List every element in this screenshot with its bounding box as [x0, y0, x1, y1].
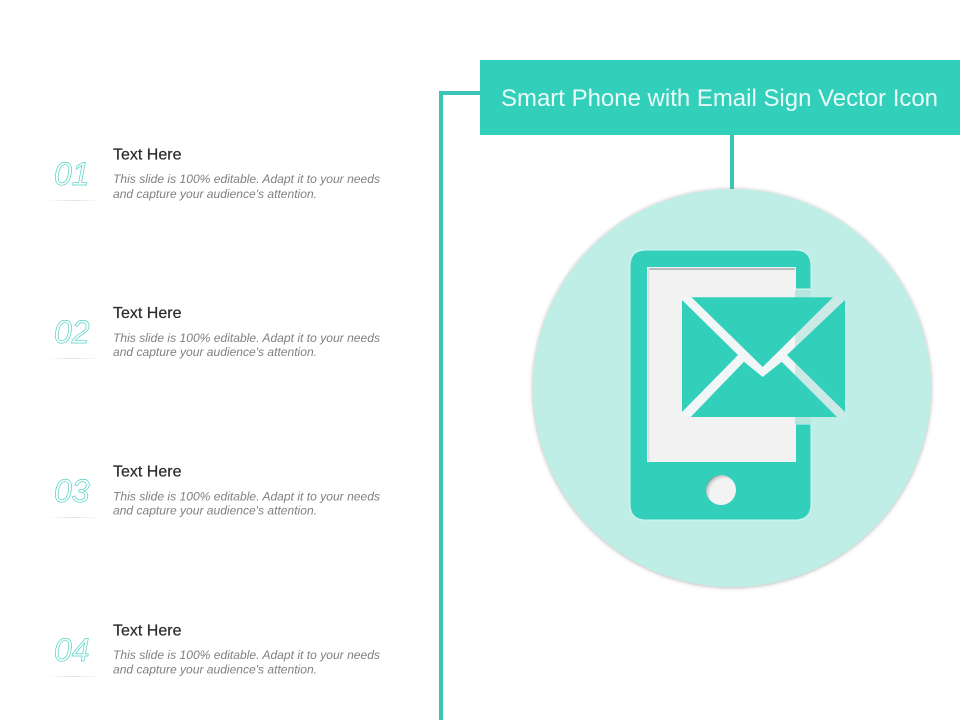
title banner	[480, 60, 960, 135]
phone screen	[647, 267, 796, 462]
number 03: 03	[54, 473, 90, 509]
item 02 body	[113, 333, 380, 359]
item 04 body: and capture your audience's attention.	[113, 664, 317, 676]
item 04 body	[113, 650, 380, 676]
item 01 heading: Text Here	[113, 146, 182, 164]
number 04: 04	[54, 632, 90, 668]
item 04 body: This slide is 100% editable. Adapt it to your needs	[113, 650, 380, 662]
item 04	[45, 622, 380, 677]
item 02 heading: Text Here	[113, 305, 182, 322]
item 04 heading: Text Here	[113, 622, 182, 640]
number 01: 01	[54, 156, 90, 192]
envelope right panel	[787, 300, 845, 412]
envelope flap	[692, 297, 833, 367]
item 02 body: and capture your audience's attention.	[113, 347, 317, 359]
connector line: header to circle	[730, 135, 734, 191]
item 03	[45, 464, 380, 518]
item 02	[45, 305, 380, 359]
icon: envelope	[682, 290, 845, 424]
phone home button	[706, 475, 736, 505]
item 03 heading: Text Here	[113, 464, 182, 480]
item 01 body: This slide is 100% editable. Adapt it to your needs	[113, 174, 380, 186]
item 01 body	[113, 174, 380, 201]
title banner: Smart Phone with Email Sign Vector Icon	[501, 85, 938, 112]
item 03 body: and capture your audience's attention.	[113, 506, 317, 518]
envelope bottom panel	[691, 362, 837, 417]
icon: smartphone	[630, 250, 811, 520]
item 02 body: This slide is 100% editable. Adapt it to your needs	[113, 333, 380, 345]
envelope left panel	[682, 300, 738, 412]
connector line: left bracket	[441, 93, 480, 720]
item 01 body: and capture your audience's attention.	[113, 189, 317, 201]
item 03 body: This slide is 100% editable. Adapt it to your needs	[113, 492, 380, 504]
item 01	[45, 146, 380, 201]
icon circle background	[533, 189, 931, 587]
number 02: 02	[54, 314, 90, 350]
item 03 body	[113, 492, 380, 518]
